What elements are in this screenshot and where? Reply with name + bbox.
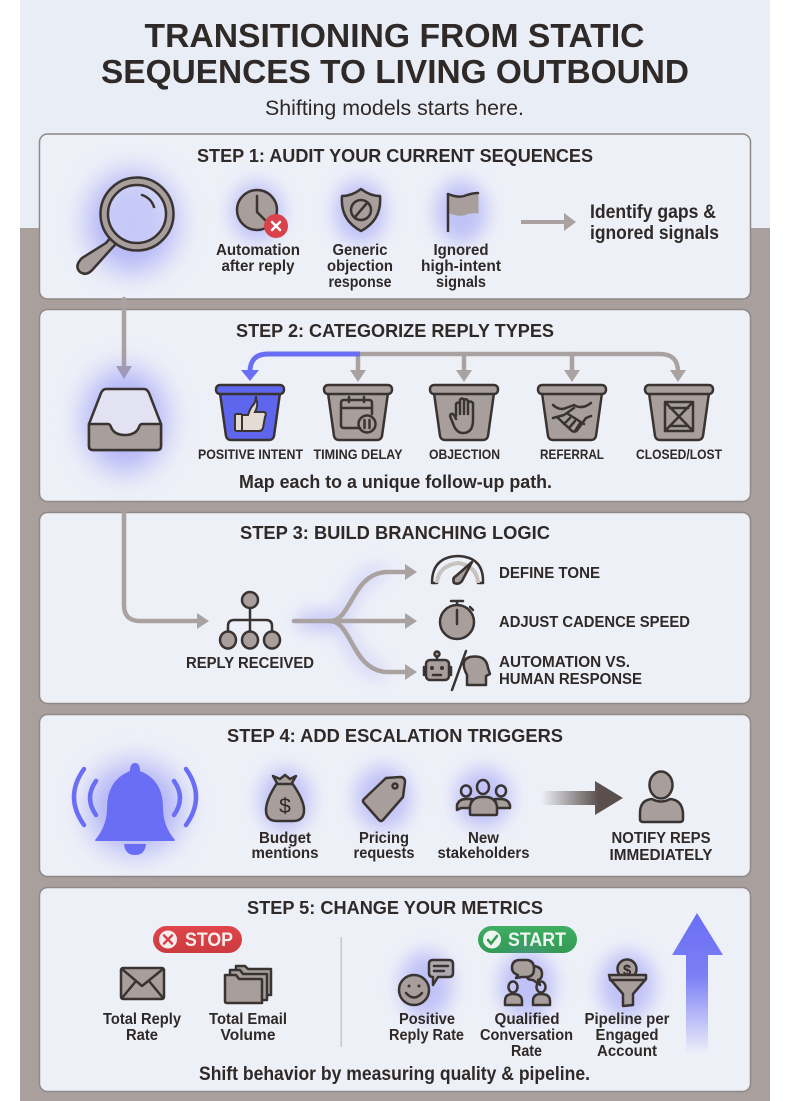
label: pipeline per engaged account: Pipeline per [584, 1011, 670, 1028]
panel: step 4 escalation [40, 714, 750, 876]
label: notify reps: NOTIFY REPS [612, 830, 711, 847]
label: ignored high-intent signals [421, 242, 502, 291]
panel: step 3 branching [40, 512, 750, 704]
label: define tone: DEFINE TONE [499, 565, 600, 582]
icon: money bag [259, 768, 311, 832]
bucket: positive intent [216, 385, 284, 440]
panel: step 1 audit [40, 134, 750, 299]
label: budget mentions: mentions [252, 845, 319, 862]
icon: price tag [355, 766, 411, 830]
icon: inbox tray [83, 368, 167, 472]
step 3 heading: STEP 3: BUILD BRANCHING LOGIC [240, 522, 550, 543]
icon: robot and human [424, 651, 490, 690]
step 4 heading: STEP 4: ADD ESCALATION TRIGGERS [227, 725, 563, 746]
label: referral: REFERRAL [540, 446, 604, 462]
text: identify gaps [590, 202, 719, 244]
badge: start: START [508, 930, 566, 951]
label: total email volume [209, 1011, 287, 1044]
icon: stopwatch [440, 601, 474, 639]
title: SEQUENCES TO LIVING OUTBOUND [101, 53, 689, 90]
label: total reply rate: Rate [126, 1027, 158, 1044]
subtitle: Shifting models starts here. [265, 97, 524, 120]
step 1 heading: STEP 1: AUDIT YOUR CURRENT SEQUENCES [197, 145, 593, 166]
label: generic objection response: Generic [332, 242, 388, 259]
label: qualified conversation rate: Qualified [494, 1011, 560, 1028]
label: pricing requests: requests [354, 845, 415, 862]
icon: folders [225, 966, 271, 1003]
icon: money bag: $ [279, 795, 291, 818]
label: new stakeholders: New [468, 830, 500, 847]
label: notify reps [610, 830, 713, 864]
label: timing delay: TIMING DELAY [314, 446, 403, 462]
icon: person [640, 772, 683, 822]
label: generic objection response: response [328, 274, 392, 291]
branching arrows [294, 564, 417, 680]
label: automation after reply: after reply [222, 258, 295, 275]
label: automation after reply [216, 242, 300, 275]
label: new stakeholders: stakeholders [438, 845, 530, 862]
label: pipeline per engaged account: Engaged [596, 1027, 658, 1044]
badge: stop [153, 926, 242, 953]
label: closed lost: CLOSED/LOST [636, 446, 722, 462]
routing connectors [241, 354, 686, 382]
divider [340, 937, 342, 1047]
label: reply received: REPLY RECEIVED [186, 655, 314, 672]
icon: smiley with speech bubble [399, 951, 453, 1019]
label: automation vs human response [499, 654, 642, 688]
arrow: upward growth [672, 913, 723, 1054]
label: budget mentions: Budget [259, 830, 312, 847]
icon: bell [74, 762, 196, 855]
label: automation vs human response: AUTOMATION VS. [499, 654, 630, 671]
label: positive reply rate [389, 1011, 464, 1044]
icon: people group [455, 768, 511, 828]
icon: funnel with coin: $ [623, 962, 632, 979]
step 2 heading: STEP 2: CATEGORIZE REPLY TYPES [236, 320, 554, 341]
label: pipeline per engaged account: Account [597, 1043, 658, 1060]
label: notify reps: IMMEDIATELY [610, 847, 713, 864]
label: automation vs human response: HUMAN RESPONSE [499, 671, 642, 688]
label: generic objection response [327, 242, 393, 291]
label: pricing requests [354, 830, 415, 862]
label: positive reply rate: Positive [399, 1011, 455, 1028]
icon: shield [334, 180, 386, 244]
arrow: to notify reps [541, 781, 623, 815]
icon: clock with x badge [231, 182, 288, 242]
bucket: timing delay [324, 385, 392, 440]
icon: funnel with coin [599, 951, 655, 1019]
title [101, 17, 689, 90]
arrow: step 2 to reply received [124, 513, 209, 629]
panel: step 5 metrics [40, 888, 750, 1092]
label: total reply rate: Total Reply [103, 1011, 181, 1028]
text: identify gaps: Identify gaps & [590, 202, 716, 223]
label: automation after reply: Automation [216, 242, 300, 259]
icon: magnifying glass [77, 172, 177, 274]
label: ignored high-intent signals: Ignored [434, 242, 488, 259]
arrow: to identify gaps [521, 213, 576, 231]
label: qualified conversation rate: Rate [511, 1043, 542, 1060]
panel: step 2 categorize [40, 299, 750, 502]
badge: stop: STOP [185, 930, 233, 951]
icon: qualified conversation [499, 951, 555, 1019]
label: qualified conversation rate [480, 1011, 573, 1060]
label: ignored high-intent signals: high-intent [421, 258, 502, 275]
bucket: objection [430, 385, 498, 440]
icon: org tree [220, 592, 280, 648]
arrow: step 1 to inbox [116, 299, 132, 379]
text: shift behavior: Shift behavior by measuring quality & pipeline. [199, 1064, 590, 1085]
label: positive reply rate: Reply Rate [389, 1027, 464, 1044]
label: ignored high-intent signals: signals [436, 274, 486, 291]
label: total email volume: Total Email [209, 1011, 287, 1028]
icon: gauge [432, 556, 483, 584]
label: budget mentions [252, 830, 319, 862]
label: new stakeholders [438, 830, 530, 862]
text: identify gaps: ignored signals [590, 223, 719, 244]
bucket: referral [538, 385, 606, 440]
badge: start [478, 926, 577, 953]
text: follow-up path: Map each to a unique follow-up path. [239, 472, 552, 492]
label: qualified conversation rate: Conversation [480, 1027, 573, 1044]
label: positive intent: POSITIVE INTENT [198, 446, 303, 462]
label: pricing requests: Pricing [359, 830, 409, 847]
label: generic objection response: objection [327, 258, 393, 275]
step 5 heading: STEP 5: CHANGE YOUR METRICS [247, 897, 543, 918]
icon: envelope [121, 968, 164, 999]
icon: flag [435, 180, 487, 244]
label: objection: OBJECTION [429, 446, 500, 462]
label: pipeline per engaged account [584, 1011, 670, 1060]
label: adjust cadence speed: ADJUST CADENCE SPEED [499, 614, 690, 631]
label: total reply rate [103, 1011, 181, 1044]
bucket: closed lost [645, 385, 713, 440]
title: TRANSITIONING FROM STATIC [144, 17, 644, 54]
label: total email volume: Volume [220, 1027, 276, 1044]
